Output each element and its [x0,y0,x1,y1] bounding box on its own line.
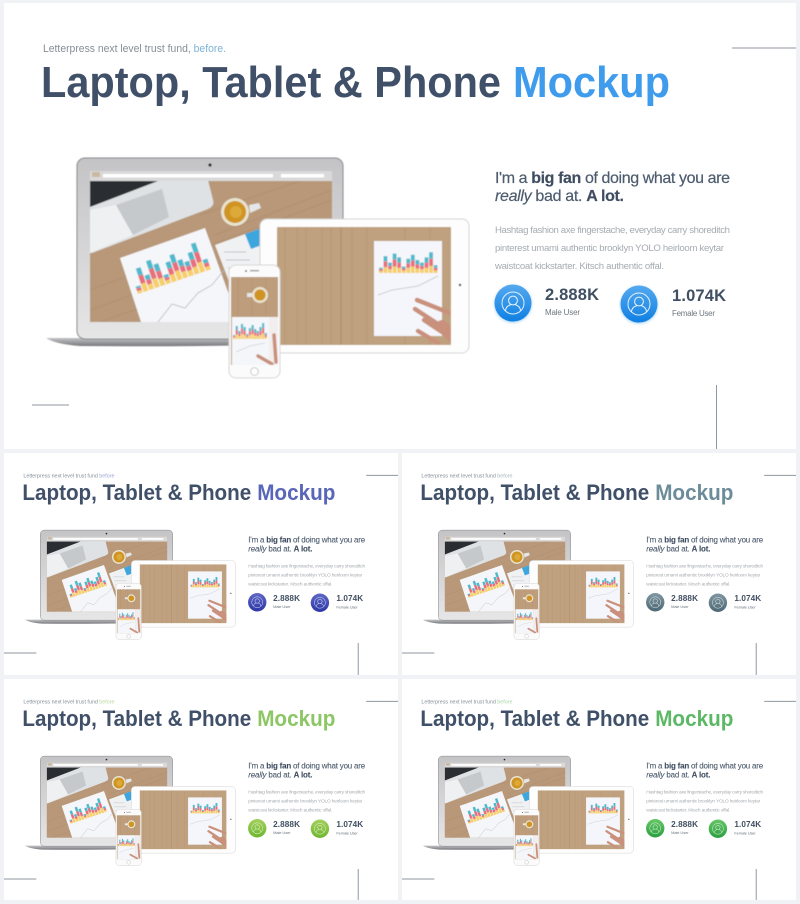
heading: I'm a big fan of doing what you are [248,536,366,545]
title: Mockup [257,480,335,505]
stat: male user: Male User [671,830,689,835]
laptop photo: notebook computer [86,176,213,253]
heading: really bad at. A lot. [248,545,312,554]
stat: female user: Female User [336,605,358,610]
corner lines [32,48,796,449]
stat: male user: Male User [273,830,291,835]
subtitle: Letterpress next level trust fund before [23,473,114,479]
body text: waistcoat kickstarter. Kitsch authentic offal. [646,581,730,587]
stat: female user [311,820,363,838]
body text: Hashtag fashion axe fingerstache, everyday carry shoreditch [495,225,730,236]
stat: male user [248,819,300,837]
body text: waistcoat kickstarter. Kitsch authentic offal. [646,807,730,813]
stat: female user: 1.074K [336,594,363,603]
stat: male user: 2.888K [545,286,599,304]
title: Laptop, Tablet & Phone [420,480,649,505]
stat: male user: Male User [545,308,580,317]
heading: really bad at. A lot. [248,771,312,780]
body text: pinterest umami authentic brooklyn YOLO heirloom keytar [248,798,363,804]
heading [646,536,764,554]
heading: really bad at. A lot. [646,771,710,780]
body text: Hashtag fashion axe fingerstache, everyday carry shoreditch [248,789,366,795]
stat: female user [709,594,761,612]
body text [248,563,366,587]
subtitle: Letterpress next level trust fund, before. [43,43,226,55]
stat: female user: 1.074K [734,594,761,603]
tablet [260,219,469,353]
body text [248,789,366,813]
heading [495,170,730,205]
body text: waistcoat kickstarter. Kitsch authentic offal. [248,807,332,813]
devices mockup [25,530,235,640]
devices mockup [423,756,633,866]
stat: male user [248,593,300,611]
title: Mockup [655,480,733,505]
heading: I'm a big fan of doing what you are [495,170,730,187]
hand [415,300,456,343]
stat: male user: Male User [671,604,689,609]
stat: male user: Male User [273,604,291,609]
laptop photo: paper with chart [120,228,240,322]
coffee cup [221,198,261,226]
stat: male user [494,284,599,322]
stat: male user: 2.888K [671,820,698,829]
body text: waistcoat kickstarter. Kitsch authentic offal. [248,581,332,587]
title: Mockup [257,706,335,731]
phone [229,265,280,378]
heading: really bad at. A lot. [646,545,710,554]
body text: waistcoat kickstarter. Kitsch authentic offal. [494,261,664,272]
subtitle: Letterpress next level trust fund before [23,699,114,705]
title: Laptop, Tablet & Phone [22,480,251,505]
stat: female user: 1.074K [734,820,761,829]
body text: Hashtag fashion axe fingerstache, everyday carry shoreditch [248,563,366,569]
stat: female user: Female User [336,831,358,836]
heading [646,762,764,780]
body text: Hashtag fashion axe fingerstache, everyday carry shoreditch [646,563,764,569]
body text: pinterest umami authentic brooklyn YOLO heirloom keytar [646,572,761,578]
slide: green variant [402,679,796,900]
stat: male user [646,819,698,837]
title: Mockup [655,706,733,731]
title: Laptop, Tablet & Phone [41,58,501,107]
heading: I'm a big fan of doing what you are [646,762,764,771]
title: Laptop, Tablet & Phone [420,706,649,731]
body text: pinterest umami authentic brooklyn YOLO heirloom keytar [495,243,725,254]
devices mockup [25,756,235,866]
subtitle: Letterpress next level trust fund before [421,473,512,479]
laptop [46,158,343,346]
devices mockup [423,530,633,640]
stat: male user: 2.888K [671,594,698,603]
stat: female user: 1.074K [672,287,726,305]
heading: really bad at. A lot. [495,188,624,205]
heading: I'm a big fan of doing what you are [646,536,764,545]
stat: male user: 2.888K [273,594,300,603]
body text: pinterest umami authentic brooklyn YOLO heirloom keytar [646,798,761,804]
slide: purple variant [4,453,398,675]
slide: blue main [4,3,796,449]
stat: female user: Female User [734,605,756,610]
body text: pinterest umami authentic brooklyn YOLO heirloom keytar [248,572,363,578]
slide: light green variant [4,679,398,900]
stat: male user: 2.888K [273,820,300,829]
body text [494,225,730,272]
stat: female user: 1.074K [336,820,363,829]
subtitle: Letterpress next level trust fund before [421,699,512,705]
heading [248,762,366,780]
heading: I'm a big fan of doing what you are [248,762,366,771]
heading [248,536,366,554]
body text [646,789,764,813]
stat: female user [709,820,761,838]
stat: female user: Female User [672,309,715,318]
title: Laptop, Tablet & Phone [22,706,251,731]
title: Mockup [513,58,670,107]
stat: female user: Female User [734,831,756,836]
stat: female user [311,594,363,612]
stat: female user [620,286,726,323]
body text [646,563,764,587]
body text: Hashtag fashion axe fingerstache, everyday carry shoreditch [646,789,764,795]
stat: male user [646,593,698,611]
devices mockup illustration [46,158,469,378]
slide: slate variant [402,453,796,675]
